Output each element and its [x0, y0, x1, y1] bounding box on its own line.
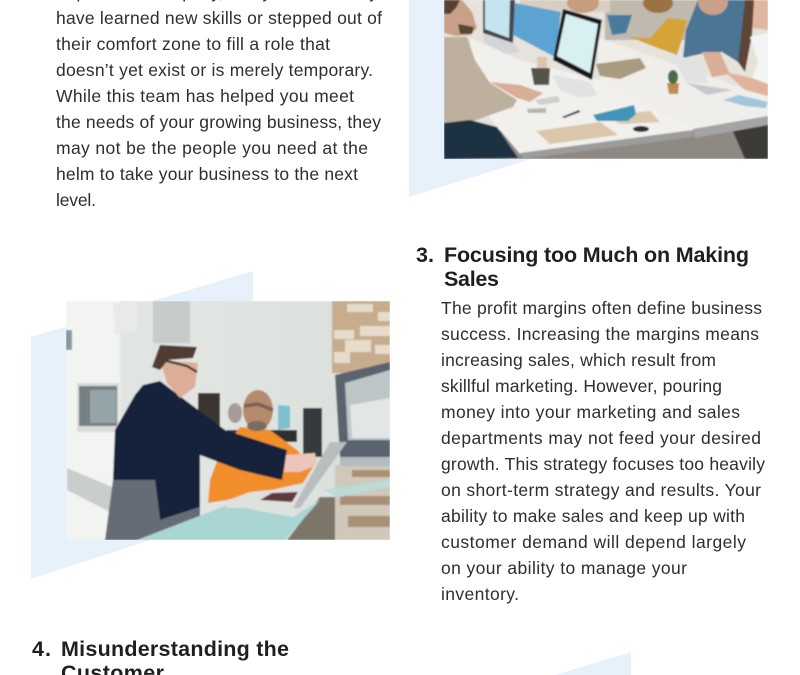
text block: sales paragraph: customer demand will depend largely [441, 532, 746, 552]
decorative panel: blue shape behind office photo [409, 0, 560, 197]
text block: sales paragraph: success. Increasing the margins means [441, 324, 759, 344]
tablet [723, 95, 768, 108]
teal notebook [593, 105, 636, 121]
heading: 4. Misunderstanding the Customer: 4. [32, 637, 51, 661]
laptop pad [260, 492, 298, 502]
man at left: trousers [444, 120, 518, 159]
wall monitor [77, 383, 119, 432]
photo: two men reviewing a laptop [66, 301, 390, 540]
front desk [470, 38, 693, 154]
mouse [633, 126, 649, 132]
text block: sales paragraph: on short-term strategy and results. Your [441, 480, 761, 500]
orange shirt man [208, 427, 313, 503]
hand [284, 453, 317, 472]
text block: sales paragraph: on your ability to manage your [441, 558, 687, 578]
man at left: shirt [444, 37, 517, 123]
front folder [536, 122, 618, 144]
text block: sales paragraph: The profit margins often define business [441, 298, 762, 318]
front monitor stand [553, 75, 597, 98]
text block: team paragraph: doesn’t yet exist or is merely temporary. [56, 60, 373, 80]
woman in mustard [630, 18, 687, 55]
posters [198, 393, 220, 431]
man at left: head [444, 0, 477, 36]
basket [596, 58, 646, 79]
decorative panel: blue shape behind meeting photo [31, 271, 253, 579]
man in navy jacket [113, 381, 287, 520]
rear monitor [483, 0, 515, 43]
glass table [137, 500, 320, 540]
lower brick wall [335, 465, 390, 540]
heading: 3. Focusing too Much on Making Sales [416, 243, 749, 291]
right desk [597, 37, 768, 129]
floor under desks [444, 130, 768, 159]
laptop screen [293, 442, 347, 508]
text block: sales paragraph: ability to make sales and keep up with [441, 506, 745, 526]
blue partition [513, 3, 561, 57]
text block: team paragraph [56, 0, 382, 210]
text block: team paragraph: the needs of your growing business, they [56, 112, 381, 132]
man at left: arm [490, 82, 543, 102]
text block: sales paragraph: skillful marketing. However, pouring [441, 376, 722, 396]
keyboard and pen [535, 96, 560, 105]
text block: sales paragraph [441, 298, 765, 604]
text block: team paragraph: While this team has helped you meet [56, 86, 354, 106]
text block: team paragraph: their comfort zone to fill a role that [56, 34, 330, 54]
heading: 4. Misunderstanding the Customer: Misunderstanding the [61, 637, 289, 661]
heading: 3. Focusing too Much on Making Sales: Focusing too Much on Making [444, 243, 749, 267]
heading: 3. Focusing too Much on Making Sales: 3. [416, 243, 434, 267]
laptop [674, 56, 708, 83]
text block: team paragraph: may not be the people you need at the [56, 138, 368, 158]
photo: team working at office desks [444, 0, 768, 159]
mug [531, 68, 550, 85]
left white wall panels [66, 301, 126, 540]
text block: sales paragraph: departments may not feed your desired [441, 428, 761, 448]
right window frame [335, 362, 390, 457]
man in navy jacket: head [160, 360, 198, 398]
heading: 3. Focusing too Much on Making Sales: Sales [444, 267, 499, 291]
text block: sales paragraph: growth. This strategy focuses too heavily [441, 454, 765, 474]
text block: team paragraph: level. [56, 190, 96, 210]
text block: sales paragraph: money into your marketing and sales [441, 402, 740, 422]
back folder [607, 111, 660, 124]
woman at right [752, 0, 768, 30]
man in navy jacket: lower grey section [105, 480, 200, 540]
man in blue [683, 0, 746, 62]
text block: team paragraph: helm to take your business to the next [56, 164, 358, 184]
front monitor [553, 9, 602, 80]
laptop base [223, 487, 300, 508]
floor under table [287, 497, 335, 540]
text block: sales paragraph: increasing sales, which result from [441, 350, 716, 370]
text block: sales paragraph: inventory. [441, 584, 519, 604]
text block: team paragraph: have learned new skills or stepped out of [56, 8, 382, 28]
upper brick wall [332, 301, 390, 373]
decorative panel: blue shape at bottom right [555, 652, 631, 675]
plant [667, 83, 679, 94]
heading: 4. Misunderstanding the Customer [32, 637, 289, 675]
